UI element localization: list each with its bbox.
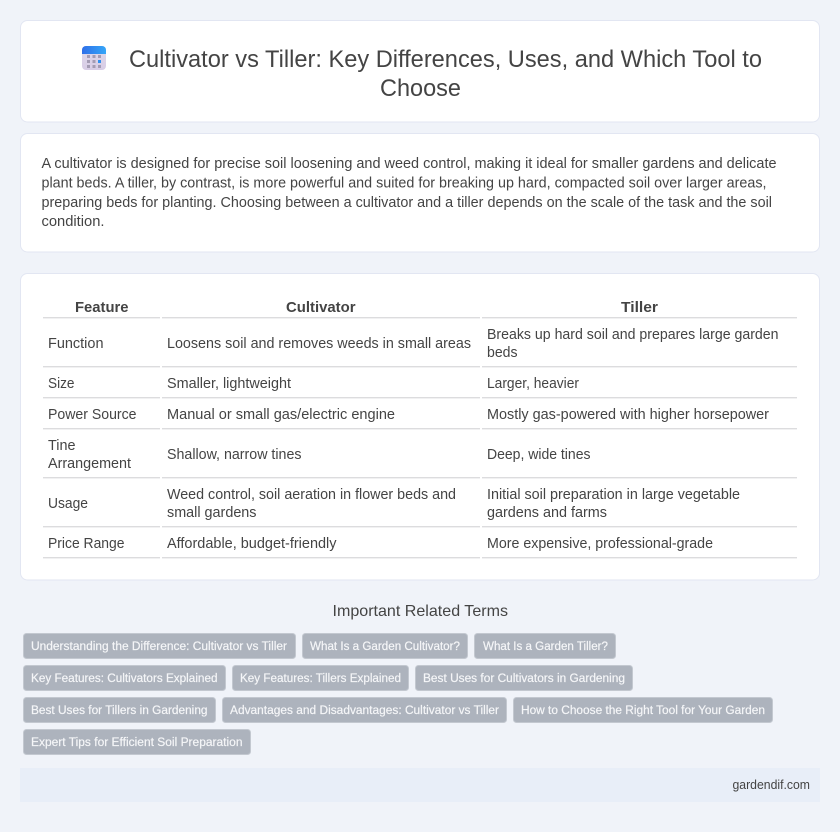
tag: [24, 666, 226, 690]
row: size: [48, 376, 579, 392]
panel: comparison table: [20, 274, 820, 580]
row: function: beds: [487, 345, 518, 361]
tag: What Is a Garden Tiller?: [483, 639, 608, 653]
footer: [20, 768, 820, 802]
summary text: plant beds. A tiller, by contrast, is more powerful and suited for breaking up hard, compacted soil over larger areas,: [42, 176, 766, 192]
row: price range: Price Range: [48, 536, 124, 552]
tag: [232, 666, 408, 690]
row: tine arrangement: Deep, wide tines: [487, 447, 590, 463]
row: usage: Usage: [48, 496, 88, 512]
row: tine arrangement: Tine: [48, 438, 76, 454]
tag: How to Choose the Right Tool for Your Garden: [521, 703, 765, 717]
related term tags: [24, 634, 772, 754]
title: Choose: [380, 75, 461, 102]
row: price range: Affordable, budget-friendly: [167, 536, 337, 552]
row: usage: Initial soil preparation in large vegetable: [487, 487, 740, 503]
row: usage: Weed control, soil aeration in flower beds and: [167, 487, 456, 503]
row: size: Smaller, lightweight: [167, 376, 291, 392]
row: power source: Manual or small gas/electric engine: [167, 407, 395, 423]
tag: [222, 698, 506, 722]
tag: What Is a Garden Cultivator?: [310, 639, 460, 653]
row: function: Breaks up hard soil and prepares large garden: [487, 327, 778, 343]
tag: [302, 634, 468, 658]
row: power source: Power Source: [48, 407, 136, 423]
row: tine arrangement: [48, 438, 590, 472]
tag: [514, 698, 772, 722]
row: size: Larger, heavier: [487, 376, 579, 392]
tag: Understanding the Difference: Cultivator vs Tiller: [31, 639, 287, 653]
summary text: A cultivator is designed for precise soil loosening and weed control, making it ideal for smaller gardens and delicate: [42, 156, 776, 172]
row: power source: [48, 407, 769, 423]
tag: [24, 730, 250, 754]
row: price range: More expensive, professional-grade: [487, 536, 713, 552]
summary text: preparing beds for planting. Choosing between a cultivator and a tiller depends on the scale of the task and the soil: [42, 195, 772, 211]
tag: Best Uses for Cultivators in Gardening: [423, 671, 625, 685]
tag: Key Features: Cultivators Explained: [31, 671, 218, 685]
panel: header: [20, 20, 820, 122]
row: function: Function: [48, 336, 104, 352]
tag: Advantages and Disadvantages: Cultivator vs Tiller: [230, 703, 499, 717]
title: Cultivator vs Tiller: Key Differences, Uses, and Which Tool to: [129, 46, 762, 73]
table header row: Feature: [75, 299, 128, 316]
tag: [24, 698, 216, 722]
row: function: [48, 327, 778, 361]
table header row: Tiller: [621, 299, 658, 316]
icon: calendar: [82, 46, 106, 70]
table card: [20, 274, 820, 580]
summary card: [20, 134, 820, 252]
tag: [474, 634, 616, 658]
panel: summary paragraph: [20, 134, 820, 252]
summary text: condition.: [42, 214, 104, 230]
row: size: Size: [48, 376, 74, 392]
row: usage: gardens and farms: [487, 505, 607, 521]
heading: important related terms: Important Related Terms: [332, 603, 508, 620]
row: usage: small gardens: [167, 505, 256, 521]
tag: Expert Tips for Efficient Soil Preparation: [31, 735, 243, 749]
table header row: Cultivator: [286, 299, 356, 316]
row: power source: Mostly gas-powered with higher horsepower: [487, 407, 769, 423]
row: usage: [48, 487, 740, 521]
row: tine arrangement: Shallow, narrow tines: [167, 447, 302, 463]
table header row: [75, 299, 658, 316]
row: price range: [48, 536, 713, 552]
header card: [20, 20, 820, 122]
tag: [24, 634, 296, 658]
tag: Key Features: Tillers Explained: [240, 671, 401, 685]
row: function: Loosens soil and removes weeds in small areas: [167, 336, 471, 352]
title: [129, 46, 762, 102]
tag: Best Uses for Tillers in Gardening: [31, 703, 208, 717]
tag: [416, 666, 632, 690]
summary text: [42, 156, 776, 230]
footer site name: gardendif.com: [732, 778, 810, 792]
row: tine arrangement: Arrangement: [48, 456, 131, 472]
